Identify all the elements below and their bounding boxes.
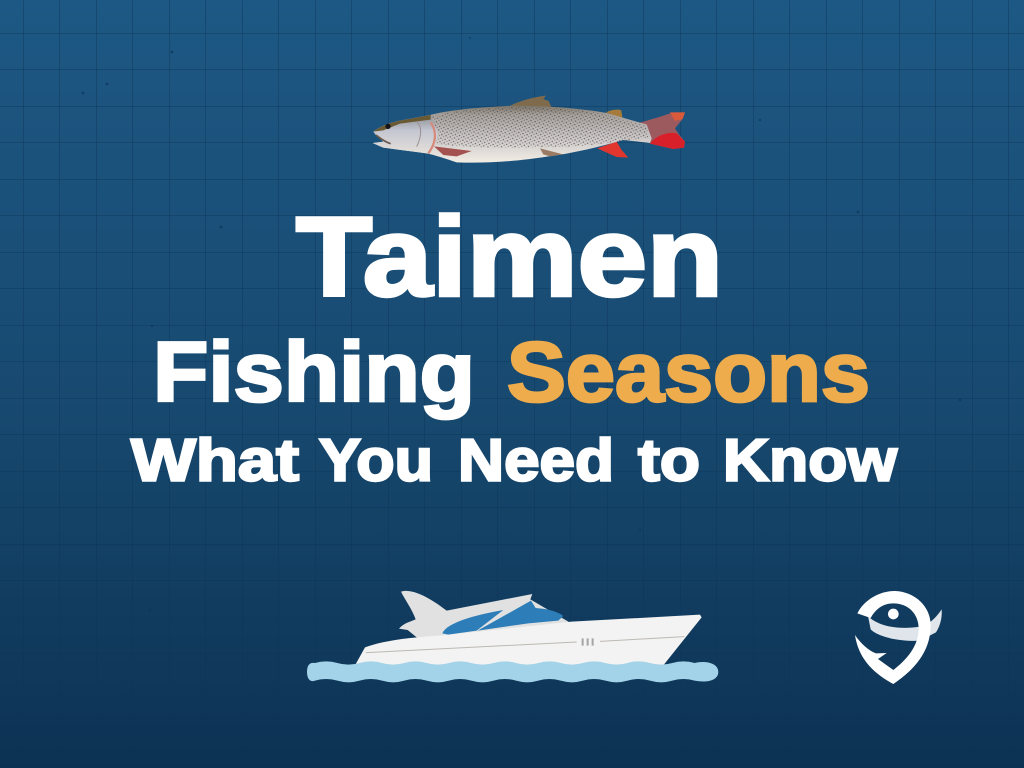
hull bbox=[355, 615, 702, 665]
window bbox=[442, 610, 503, 635]
adipose fin bbox=[606, 110, 623, 119]
icon: logo bbox=[855, 591, 942, 684]
subheading: to bbox=[638, 428, 700, 494]
subheading: Need bbox=[458, 428, 614, 494]
icon: boat bbox=[307, 591, 718, 682]
logo eye bbox=[888, 609, 899, 619]
subheading bbox=[131, 428, 897, 494]
head bbox=[373, 115, 438, 153]
icon: taimen fish bbox=[373, 96, 685, 163]
water bbox=[307, 661, 718, 682]
body bbox=[373, 106, 652, 163]
heading: Fishing Seasons: Seasons bbox=[507, 325, 870, 419]
flybridge radar arch bbox=[399, 591, 572, 640]
subheading: Know bbox=[723, 428, 897, 494]
subheading: You bbox=[319, 428, 433, 494]
logo band bbox=[868, 609, 942, 641]
anal fin bbox=[597, 142, 628, 158]
tail bbox=[637, 112, 685, 149]
subheading: What bbox=[131, 428, 299, 494]
title bbox=[131, 194, 897, 494]
vents bbox=[583, 638, 593, 646]
dorsal fin bbox=[510, 96, 552, 108]
heading: Fishing Seasons bbox=[153, 325, 870, 419]
ventral fin bbox=[540, 148, 563, 156]
hull stripe bbox=[366, 637, 684, 653]
logo outline bbox=[855, 591, 931, 684]
windshield bbox=[478, 601, 563, 631]
heading: Taimen: Taimen bbox=[296, 194, 723, 320]
pectoral fin bbox=[434, 146, 472, 156]
heading: Fishing Seasons: Fishing bbox=[153, 325, 475, 419]
